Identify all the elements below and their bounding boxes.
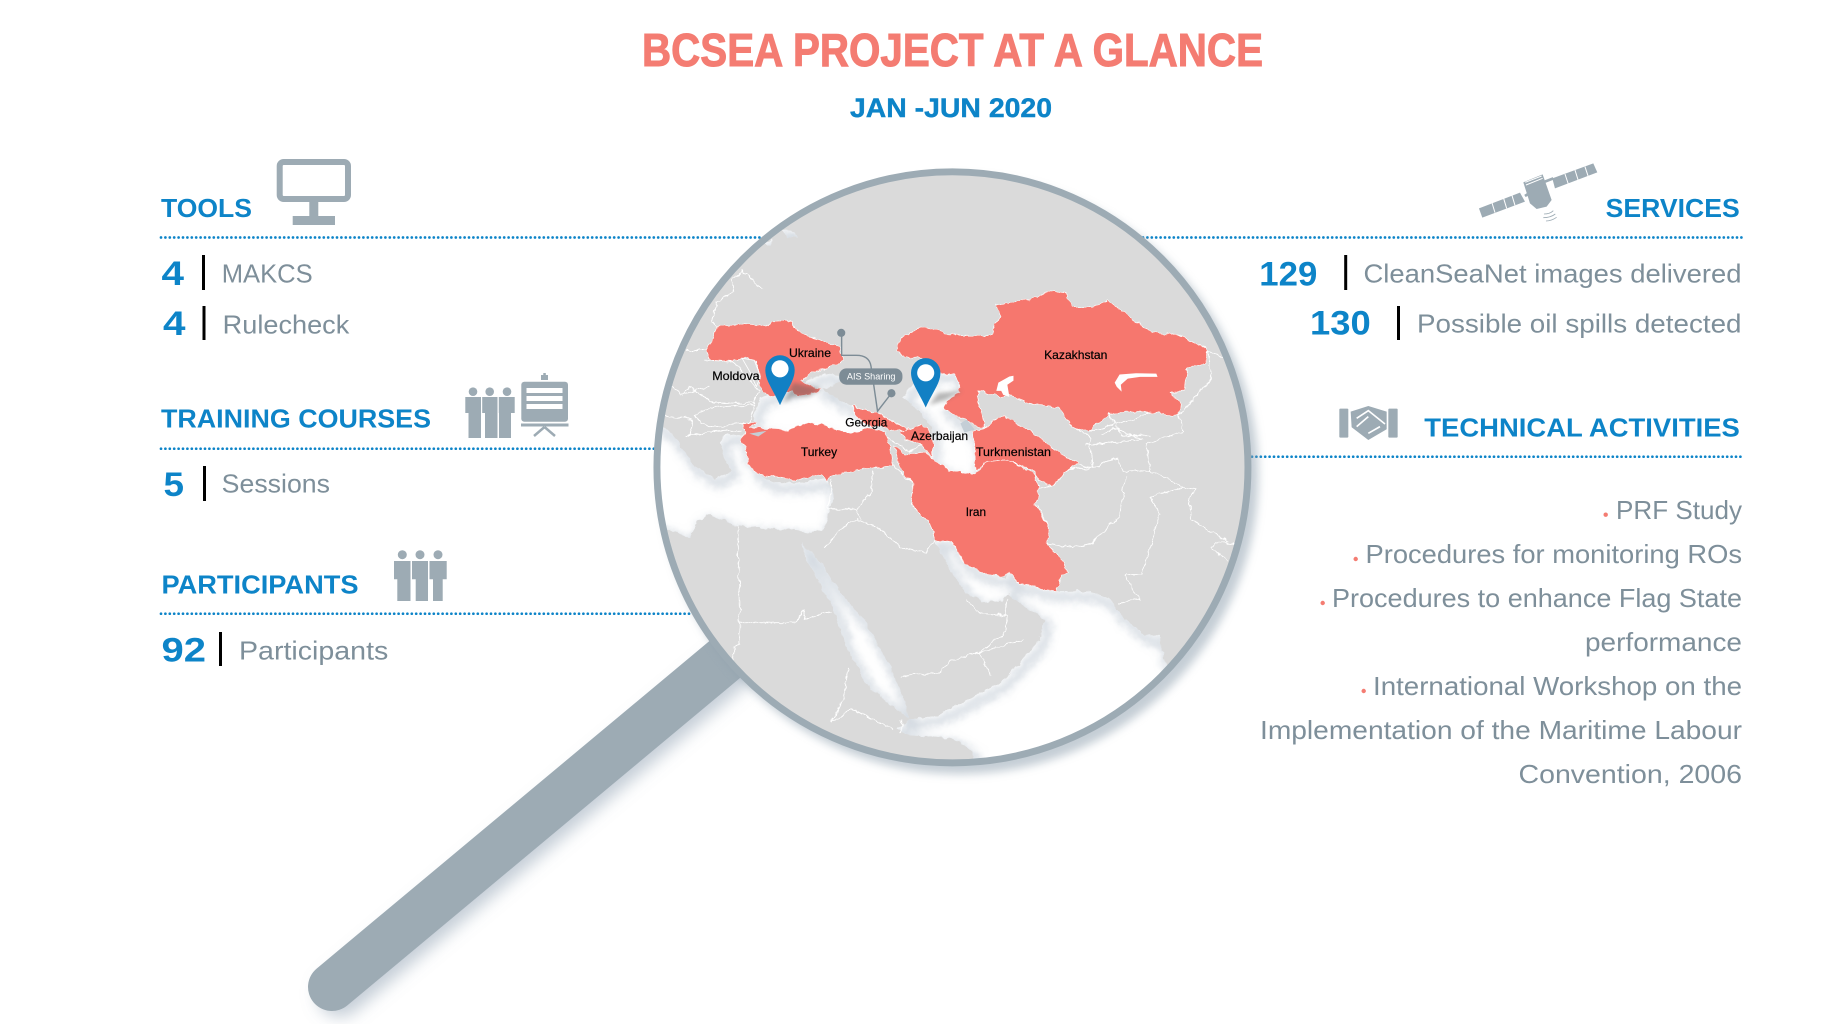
- country: Azerbaijan: [901, 423, 934, 456]
- country: Turkey: [740, 421, 893, 481]
- heading: technical activities: TECHNICAL ACTIVITIES: [1424, 413, 1740, 443]
- bulleted list of activities: Procedures to enhance Flag State: [1332, 583, 1742, 613]
- country: Turkmenistan: [971, 415, 1079, 487]
- stat: 92 participants: 92: [162, 632, 206, 670]
- title: BCSEA PROJECT AT A GLANCE: [642, 24, 1263, 76]
- stat: possible oil spills: Possible oil spills detected: [1417, 309, 1742, 339]
- lens ring: [657, 172, 1248, 763]
- panel: participants: [161, 550, 690, 670]
- country labels: Turkey: [801, 445, 838, 459]
- stat: possible oil spills: [1310, 305, 1742, 343]
- map: [660, 175, 1244, 760]
- stat: Rulecheck: 4: [163, 305, 186, 343]
- Moldova wedge: [742, 358, 760, 387]
- country labels: Moldova: [712, 369, 760, 383]
- panel: technical activities: [1252, 406, 1743, 789]
- stat: Rulecheck: Rulecheck: [223, 309, 350, 339]
- country labels: Georgia: [845, 415, 888, 429]
- stat: MAKCS: 4: [162, 255, 184, 293]
- magnifying glass lens with map: [654, 168, 1263, 778]
- stat: MAKCS: [162, 255, 313, 293]
- panel: training courses: [161, 373, 655, 504]
- icon: trainees and presentation board: [465, 373, 568, 438]
- bulleted list of activities: Convention, 2006: [1518, 759, 1742, 789]
- stat: Rulecheck: [163, 305, 350, 343]
- seas: [660, 230, 1167, 758]
- subtitle: period: JAN -JUN 2020: [850, 93, 1052, 123]
- country labels: Iran: [966, 505, 986, 519]
- country labels: Turkmenistan: [976, 445, 1051, 459]
- stat: sessions: [164, 466, 330, 504]
- bulleted list of activities: International Workshop on the: [1373, 671, 1742, 701]
- stat: CleanSeaNet images: CleanSeaNet images delivered: [1364, 258, 1742, 288]
- stat: sessions: 5: [164, 466, 184, 504]
- stat: CleanSeaNet images: 129: [1259, 255, 1317, 293]
- heading: participants: PARTICIPANTS: [162, 569, 358, 599]
- map pin: Black Sea: [765, 355, 795, 405]
- pin shadows: [784, 383, 962, 405]
- countries: project members: [706, 291, 1207, 592]
- stat: sessions: Sessions: [222, 469, 330, 499]
- magnifying glass handle: [332, 661, 731, 994]
- bulleted list of activities: [1260, 495, 1742, 789]
- stat: possible oil spills: 130: [1310, 305, 1371, 343]
- country labels: Azerbaijan: [911, 429, 968, 443]
- map pin: Caspian Sea: [911, 358, 940, 408]
- country labels: [712, 346, 1108, 519]
- country labels: Ukraine: [789, 346, 831, 360]
- icon: participants: [394, 550, 447, 601]
- country borders: [664, 270, 1234, 734]
- country: Kazakhstan: [896, 291, 1207, 432]
- icon: monitor: [280, 162, 348, 225]
- country: Georgia: [852, 406, 909, 432]
- stat: MAKCS: MAKCS: [222, 259, 313, 289]
- stat: 92 participants: [162, 632, 388, 670]
- bulleted list of activities: performance: [1585, 627, 1742, 657]
- panel: services: [1143, 163, 1743, 343]
- bulleted list of activities: Procedures for monitoring ROs: [1366, 539, 1742, 569]
- heading: services: SERVICES: [1606, 193, 1740, 223]
- bulleted list of activities: PRF Study: [1616, 495, 1742, 525]
- lakes: Aral and Balkhash: [996, 373, 1158, 397]
- stat: CleanSeaNet images: [1259, 255, 1742, 293]
- country: Iran: [893, 446, 1069, 592]
- country labels: Kazakhstan: [1044, 348, 1108, 362]
- stat: 92 participants: Participants: [239, 635, 388, 665]
- country: Ukraine: [706, 320, 843, 397]
- icon: satellite: [1479, 163, 1597, 221]
- AIS sharing connector: AIS Sharing: [847, 371, 896, 381]
- bulleted list of activities: Implementation of the Maritime Labour: [1260, 715, 1742, 745]
- heading: tools: TOOLS: [161, 193, 252, 223]
- icon: handshake: [1339, 406, 1398, 440]
- Kara-Bogaz and Marmara: [749, 419, 975, 437]
- heading: training courses: TRAINING COURSES: [161, 403, 431, 433]
- AIS sharing connector: [837, 329, 902, 411]
- panel: tools: [161, 162, 765, 343]
